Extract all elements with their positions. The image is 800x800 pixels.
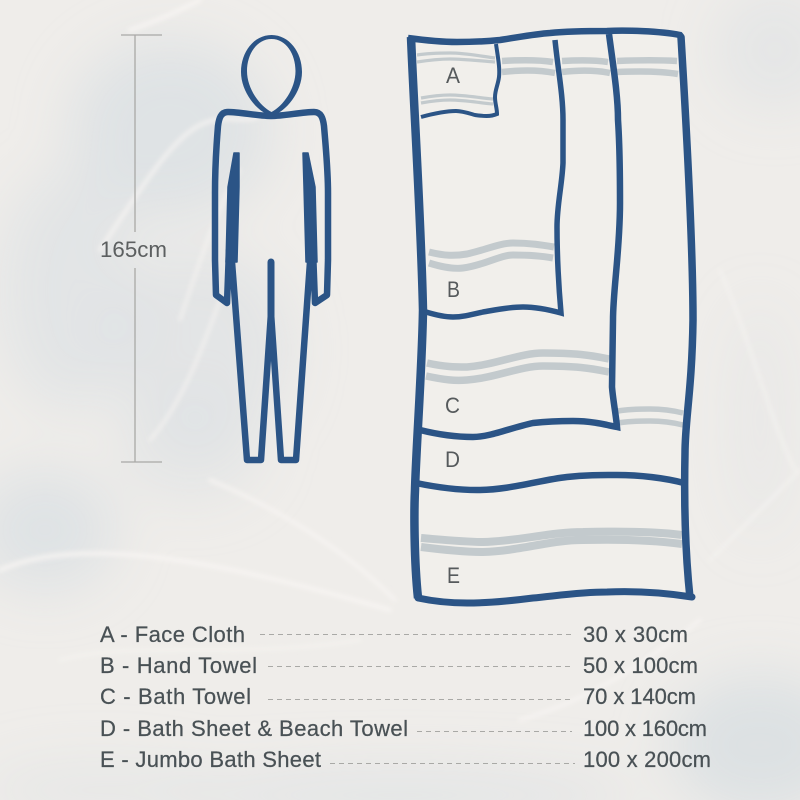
legend row B: 50 x 100cm: [583, 653, 698, 678]
legend row D: 100 x 160cm: [583, 716, 707, 741]
towel letter labels: C: [445, 393, 460, 418]
size legend: [100, 622, 711, 772]
towel diagram: [408, 31, 693, 603]
legend row E: E - Jumbo Bath Sheet: [100, 747, 321, 772]
towel C outline: [420, 34, 620, 437]
towel letter labels: E: [447, 563, 460, 588]
figure head: [241, 35, 302, 116]
towel A outline: [421, 44, 499, 117]
legend row C: [100, 684, 696, 709]
towel E outer outline: [408, 31, 693, 603]
legend row D: [100, 716, 707, 741]
figure inner leg line: [268, 262, 274, 318]
figure inner right arm line: [303, 153, 317, 262]
towel letter labels: A: [446, 63, 460, 88]
figure inner left arm line: [226, 153, 239, 262]
legend row C: C - Bath Towel: [100, 684, 251, 709]
towel letter labels: D: [445, 447, 460, 472]
legend row B: [100, 653, 698, 678]
legend row B: B - Hand Towel: [100, 653, 257, 678]
legend row D: D - Bath Sheet & Beach Towel: [100, 716, 408, 741]
height label: 165cm: [100, 237, 167, 262]
figure body outline: [215, 112, 328, 460]
legend row E: [100, 747, 711, 772]
human figure: [215, 35, 328, 460]
towel letter labels: B: [447, 277, 460, 302]
legend row E: 100 x 200cm: [583, 747, 711, 772]
towel letter labels: [445, 63, 460, 588]
legend row A: 30 x 30cm: [583, 622, 688, 647]
legend row A: A - Face Cloth: [100, 622, 245, 647]
legend row C: 70 x 140cm: [583, 684, 696, 709]
towel fill: [410, 31, 693, 603]
height scale: [100, 35, 167, 462]
towel D outline: [416, 475, 684, 490]
towel B outline: [426, 40, 563, 317]
towel stripes: [417, 53, 683, 552]
legend row A: [100, 622, 688, 647]
